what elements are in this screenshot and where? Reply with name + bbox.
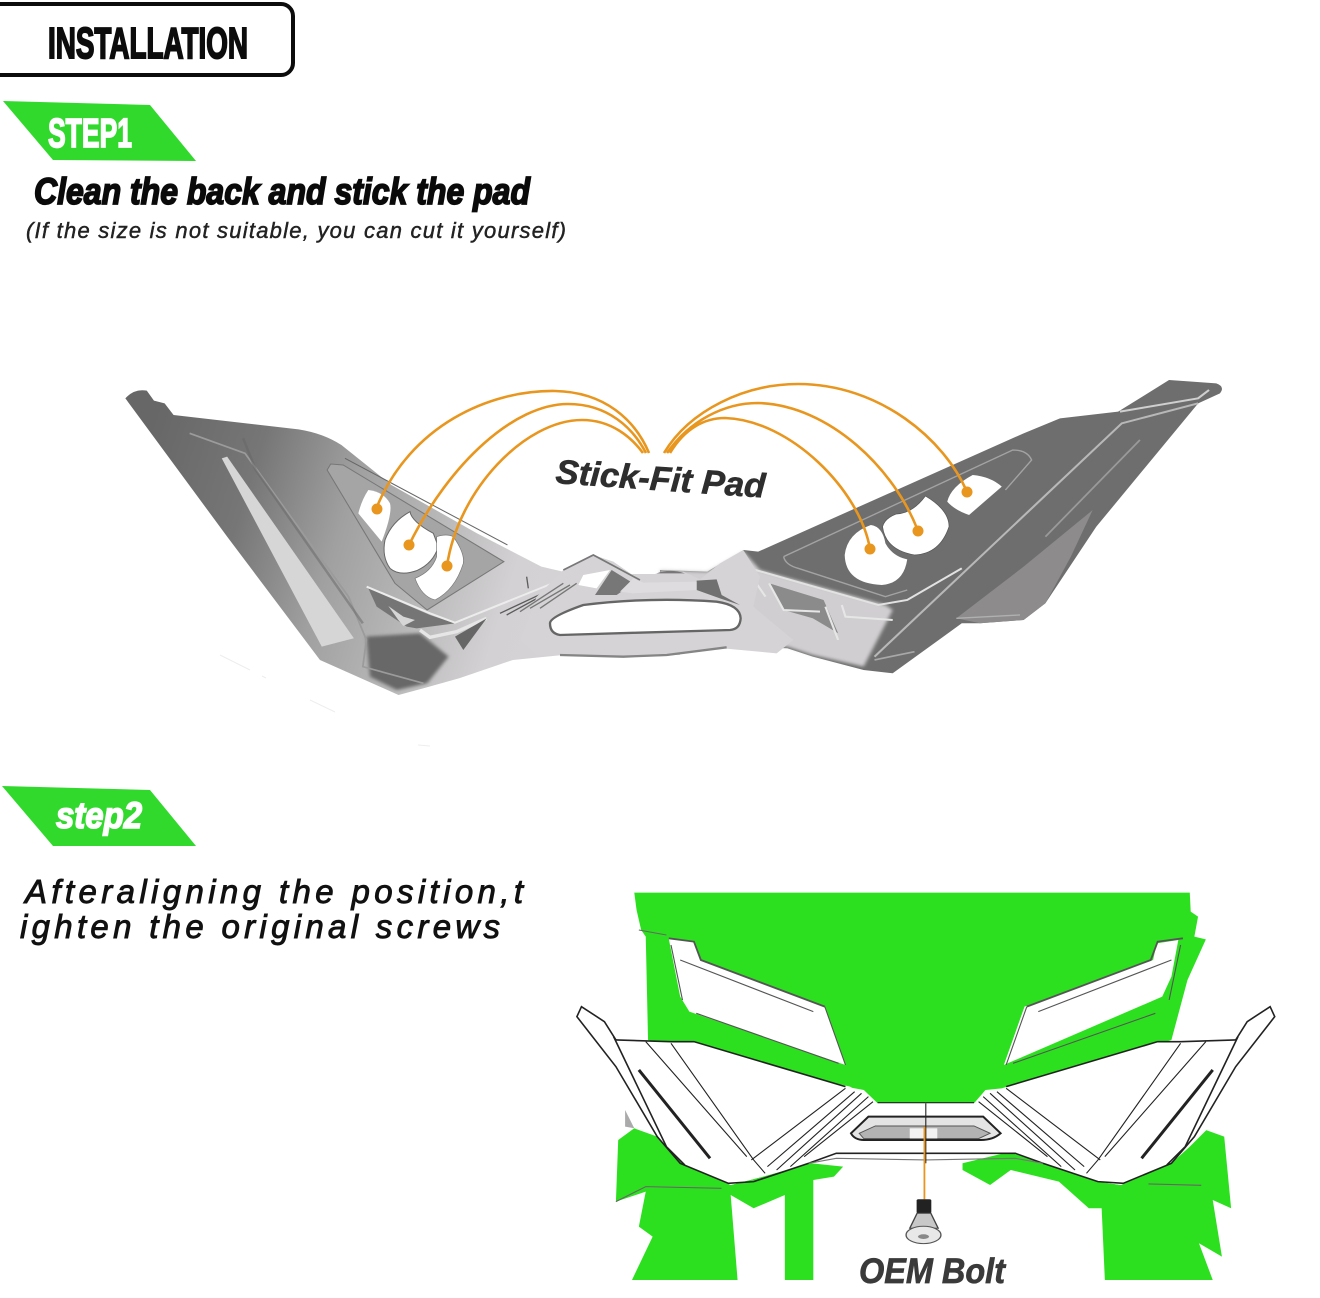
step 1 badge: STEP1 [48,110,132,156]
OEM Bolt label: OEM Bolt [859,1252,1006,1291]
step 2 instructions: ighten the original screws [20,908,500,945]
step 2 instructions: Afteraligning the position,t [23,873,525,910]
step 1 badge [3,101,196,161]
step 2 instructions [20,873,525,945]
right wing [660,380,1222,673]
orange callout arcs with dots [372,384,972,572]
Stick-Fit Pad label: Stick-Fit Pad [554,453,768,506]
title box: INSTALLATION [0,4,293,75]
part photo: fairing rear view with pads [125,380,1222,695]
line drawing: motorcycle front with green background [577,893,1275,1280]
left wing [125,390,680,695]
headlight slot [851,1117,1001,1140]
grey patch [625,1110,634,1128]
centre bridge with slot [520,550,793,657]
title box: INSTALLATION: INSTALLATION [48,19,248,68]
centre line to bolt [924,1103,926,1199]
left half linework [577,938,926,1183]
step 1 heading: Clean the back and stick the pad [34,171,531,212]
headlights [669,938,1178,1065]
step 2 badge: step2 [56,795,142,836]
left bridge details [367,575,580,650]
left pads [358,490,464,600]
edge marks on green [616,930,1201,1202]
green cut-out body [616,893,1231,1280]
icon: OEM bolt [906,1199,941,1244]
faint marks under part [220,655,430,746]
step 1 note: (If the size is not suitable, you can cut it yourself) [26,218,566,243]
fairing wings [577,1007,1275,1185]
right pads [845,475,1002,585]
step 2 badge [2,786,196,846]
